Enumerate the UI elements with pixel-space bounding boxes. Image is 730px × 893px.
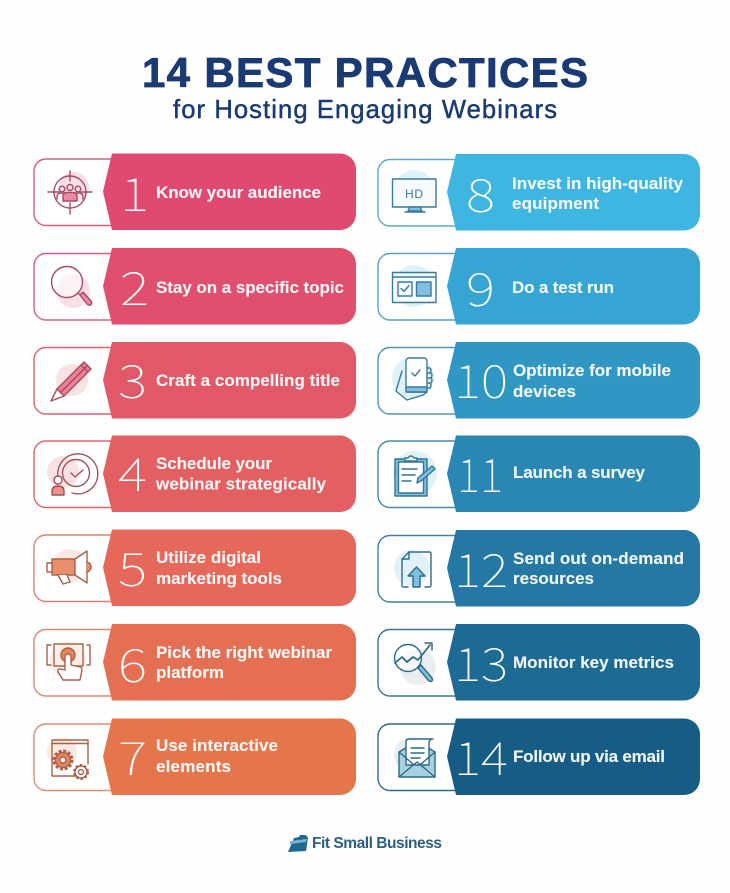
subtitle: for Hosting Engaging Webinars	[173, 96, 557, 124]
label 1: Know your audience	[156, 183, 321, 202]
panel: practice 12	[378, 530, 700, 606]
number 11: 11	[457, 440, 503, 506]
number 10: 10	[454, 346, 508, 412]
icon: clock and person	[47, 454, 98, 495]
icon: envelope	[394, 737, 435, 777]
icon: test window	[392, 265, 436, 307]
panel: practice 4	[34, 436, 356, 512]
panel: practice 7	[34, 718, 356, 795]
label 6: platform	[156, 663, 224, 682]
label 4: Schedule your	[156, 454, 272, 473]
number 8: 8	[466, 160, 495, 226]
panel: practice 2	[34, 248, 356, 324]
panel: practice 11	[378, 436, 700, 512]
icon: HD monitor	[392, 170, 436, 212]
label 9: Do a test run	[512, 278, 614, 297]
panel: practice 3	[34, 342, 356, 418]
icon: touch screen	[47, 642, 90, 680]
label 7: elements	[156, 757, 231, 776]
icon: megaphone	[47, 549, 91, 584]
number 14: 14	[454, 723, 508, 789]
label 10: devices	[513, 382, 576, 401]
title: 14 BEST PRACTICES	[142, 49, 588, 96]
label 8: equipment	[512, 194, 599, 213]
panel: practice 5	[34, 530, 356, 606]
label 14: Follow up via email	[513, 747, 665, 766]
number 7: 7	[118, 723, 147, 789]
panel: practice 14	[378, 718, 700, 795]
label 12: resources	[513, 569, 594, 588]
number 9: 9	[466, 254, 495, 320]
label 3: Craft a compelling title	[156, 371, 340, 390]
panel: practice 10	[378, 342, 700, 418]
icon: document upload	[394, 550, 431, 587]
icon: phone in hand	[392, 357, 434, 400]
number 2: 2	[120, 253, 149, 319]
icon: magnifier	[52, 266, 92, 308]
label 12: Send out on-demand	[513, 549, 684, 568]
number 5: 5	[118, 534, 147, 600]
panel: practice 1	[34, 154, 356, 230]
panel: practice 8	[378, 154, 700, 230]
number 1: 1	[120, 159, 149, 225]
label 5: Utilize digital	[156, 548, 261, 567]
brand name: Fit Small Business	[312, 835, 442, 852]
icon: audience target	[48, 171, 92, 214]
label 8: Invest in high-quality	[512, 174, 684, 193]
label 5: marketing tools	[156, 569, 282, 588]
number 12: 12	[454, 535, 508, 601]
label 13: Monitor key metrics	[513, 653, 674, 672]
number 3: 3	[118, 346, 147, 412]
label 2: Stay on a specific topic	[156, 278, 344, 297]
icon: metrics magnifier	[394, 643, 436, 685]
number 6: 6	[118, 630, 147, 696]
icon: HD monitor: HD	[405, 187, 423, 201]
label 6: Pick the right webinar	[156, 643, 332, 662]
icon: clipboard	[393, 451, 437, 496]
footer logo	[288, 835, 442, 852]
label 7: Use interactive	[156, 736, 278, 755]
number 13: 13	[454, 629, 508, 695]
number 4: 4	[118, 439, 147, 505]
icon: settings window	[47, 737, 88, 779]
panel: practice 13	[378, 624, 700, 700]
icon: briefcase	[288, 835, 308, 852]
label 10: Optimize for mobile	[513, 361, 671, 380]
label 11: Launch a survey	[513, 463, 646, 482]
icon: pencil	[51, 362, 91, 401]
panel: practice 9	[378, 248, 700, 324]
panel: practice 6	[34, 624, 356, 700]
label 4: webinar strategically	[155, 474, 327, 494]
